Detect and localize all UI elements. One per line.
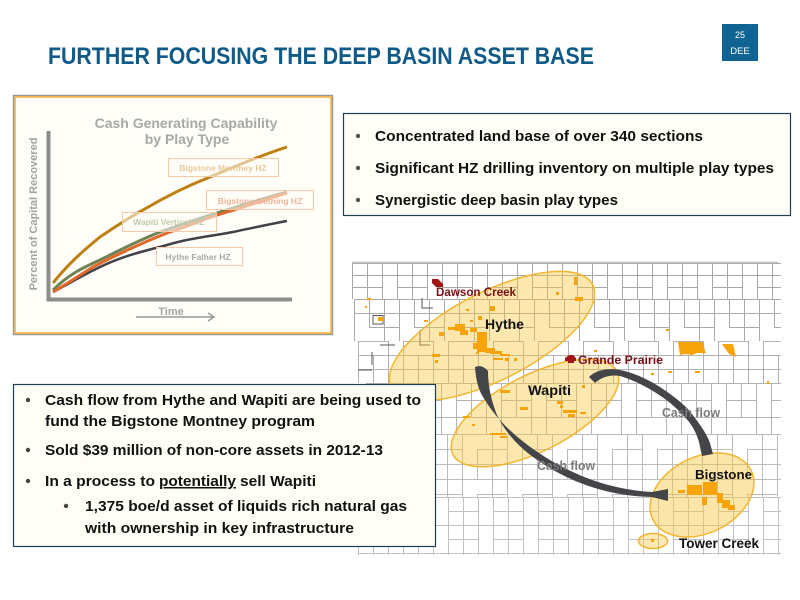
label: Cash flow right: Cash flow: [662, 405, 721, 420]
bullet: potential sale: In a process to: [45, 473, 155, 490]
bullet: potential sale: potentially: [159, 473, 237, 490]
chart heading: Cash Generating Capability: [95, 115, 278, 131]
map grid: [352, 262, 781, 555]
label: Hythe Falher HZ: [156, 248, 242, 266]
bullet: cash flow funding: Cash flow from Hythe and Wapiti are being used to: [45, 392, 421, 409]
label: Bigstone Montney HZ: Bigstone Montney HZ: [179, 163, 267, 173]
map: [352, 245, 781, 555]
sub-bullet: Wapiti asset detail: with ownership in key infrastructure: [84, 520, 354, 537]
label: Bigstone Montney HZ: [168, 158, 278, 176]
bullet: potential sale: [26, 473, 316, 490]
curve: Hythe Falher: [53, 221, 287, 292]
ellipse: Hythe: [371, 245, 613, 427]
page number badge: 25: [735, 30, 745, 40]
arrow: Hythe cash flow to Bigstone: [475, 366, 668, 501]
curve: Wapiti Vertical: [53, 192, 287, 290]
label: Tower Creek: Tower Creek: [679, 536, 759, 551]
ellipse: Wapiti: [436, 337, 634, 489]
label: Wapiti Vertical HZ: Wapiti Vertical HZ: [133, 217, 205, 227]
bullet: potential sale: sell Wapiti: [240, 473, 316, 490]
title: FURTHER FOCUSING THE DEEP BASIN ASSET BASE: [48, 43, 594, 70]
icon: Dawson Creek marker: [432, 279, 443, 287]
bullet: cash flow funding: fund the Bigstone Montney program: [45, 413, 315, 430]
curve: Bigstone Montney: [53, 147, 287, 283]
arrow: Wapiti cash flow to Bigstone: [589, 369, 713, 456]
page number badge: [722, 24, 758, 61]
arrow: time: [136, 313, 214, 321]
label: Bigstone Gething HZ: Bigstone Gething HZ: [218, 196, 302, 206]
label: Dawson Creek: Dawson Creek: [436, 287, 517, 299]
bullet 3: Synergistic deep basin play types: [375, 192, 618, 209]
sub-bullet: Wapiti asset detail: 1,375 boe/d asset of liquids rich natural gas: [85, 498, 407, 515]
panel: cash flow notes: [14, 384, 436, 546]
sub-bullet: Wapiti asset detail: [64, 498, 407, 537]
ellipse: Bigstone: [636, 436, 768, 554]
axes: [48, 131, 292, 300]
label: Wapiti Vertical HZ: [122, 212, 216, 232]
label: Bigstone: Bigstone: [695, 467, 752, 482]
bullet 1: Concentrated land base of over 340 sections: [375, 128, 703, 145]
y axis label: Percent of Capital Recovered: [28, 138, 40, 290]
ellipse: Tower Creek: [638, 534, 668, 548]
x axis label: Time: [158, 306, 184, 318]
icon: Grande Prairie marker: [565, 355, 576, 363]
label: Hythe: Hythe: [485, 317, 525, 332]
label: Cash flow left: Cash flow: [537, 458, 596, 473]
bullet: cash flow funding: [26, 392, 421, 430]
curve: Bigstone Gething: [53, 193, 287, 292]
label: Bigstone Gething HZ: [206, 190, 314, 210]
page number badge: DEE: [730, 46, 750, 57]
bullet: asset sale: Sold $39 million of non-core assets in 2012-13: [45, 442, 383, 459]
label: Hythe Falher HZ: Hythe Falher HZ: [165, 252, 231, 262]
label: Grande Prairie: Grande Prairie: [578, 355, 663, 367]
chart subheading: by Play Type: [145, 131, 229, 147]
land holdings: [365, 277, 769, 542]
panel: cash generating chart: [14, 96, 332, 334]
bullet 2: Significant HZ drilling inventory on multiple play types: [375, 160, 774, 177]
panel: key points: [344, 114, 790, 216]
label: Wapiti: Wapiti: [528, 383, 571, 398]
